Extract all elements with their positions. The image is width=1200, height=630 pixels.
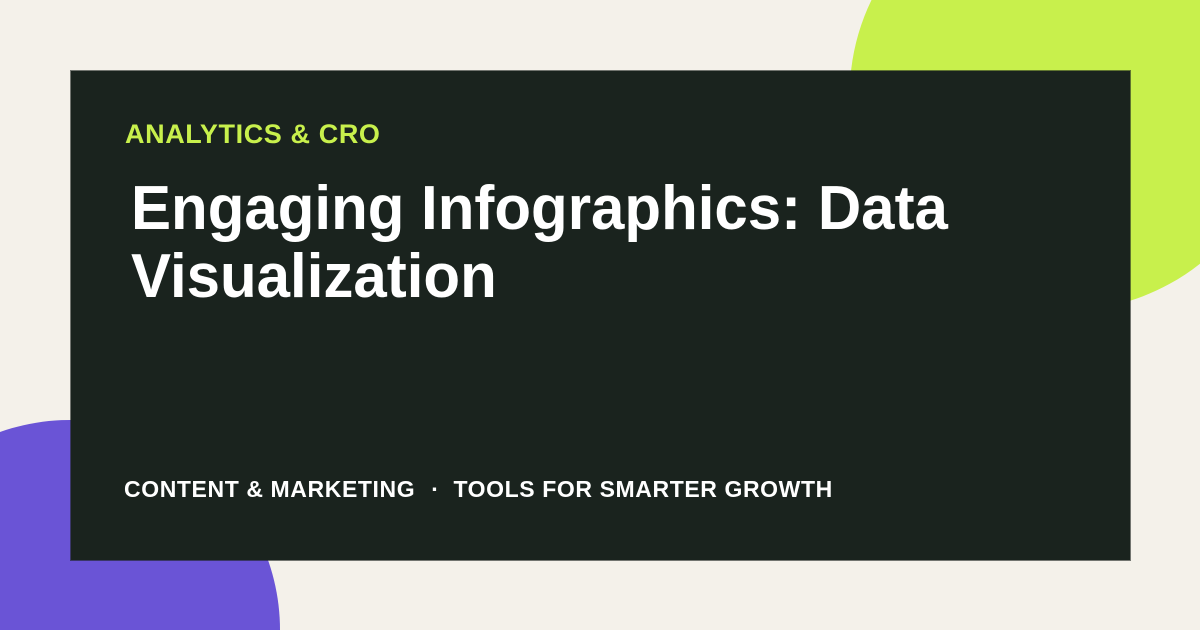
title: Engaging Infographics: Data (131, 174, 948, 243)
title (131, 174, 948, 311)
title: Visualization (131, 242, 497, 311)
footer tagline: CONTENT & MARKETING · TOOLS FOR SMARTER GROWTH (124, 476, 833, 502)
decorative circle: lime (850, 0, 1200, 311)
category label: ANALYTICS & CRO (125, 119, 381, 149)
panel: dark card (70, 70, 1131, 561)
decorative circle: purple (0, 420, 280, 630)
